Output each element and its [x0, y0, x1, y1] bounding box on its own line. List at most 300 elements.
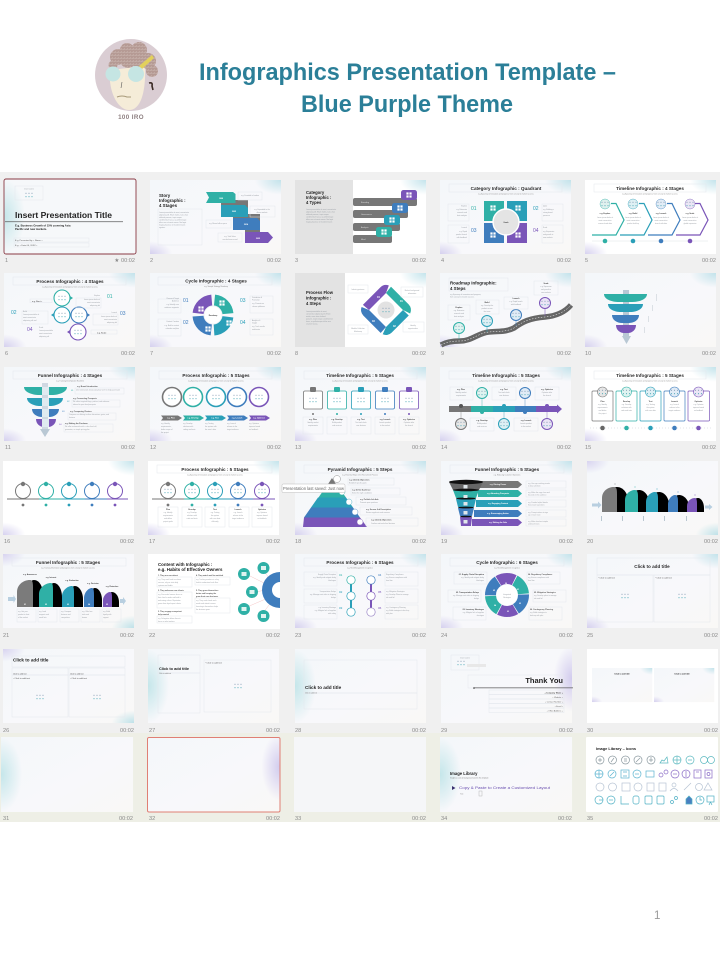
slide 10: funnel graphic without text	[585, 273, 716, 357]
slide 21: funnel infographic arches with text: Funnel Infographic : 5 Stages	[36, 560, 101, 565]
slide 20: arches graphic without text: 00:02	[704, 539, 718, 545]
slide 18: pyramid infographic 5 steps: e.g. Identify Objectives	[349, 478, 370, 482]
slide 22: content with infographic: 5. They grow themselves	[196, 589, 218, 592]
slide 24: cycle infographic 6 stages: Cycle Infographic : 6 Stages	[476, 560, 538, 565]
slide 11: funnel infographic 4 stages: e.g. Making the Purchase	[65, 422, 88, 425]
slide 32: blank selected slide: 00:02	[266, 816, 280, 822]
slide 21: funnel infographic arches with text: e.g. Evaluation	[65, 579, 80, 582]
slide 18: pyramid infographic 5 steps: e.g. Essential Steps in the Recruitment Process	[342, 474, 378, 476]
slide 2: story infographic: Story	[159, 193, 171, 198]
slide 9: roadmap infographic: 4 Steps	[450, 286, 466, 291]
slide 25: two content layout, centered title: 00:02	[704, 633, 718, 639]
slide 25: two content layout, centered title	[587, 554, 718, 639]
slide 7: cycle infographic 4 stages: Audience	[172, 300, 179, 302]
slide 29: thank you slide	[441, 649, 573, 734]
slide 3: category infographic 4 types: condimentum lacus, ac pellentesque	[306, 216, 333, 218]
slide 23: process infographic 6 stages	[295, 554, 426, 639]
slide 6: process infographic 4 stages	[4, 273, 135, 357]
slide 3: category infographic 4 types: 4 Types	[306, 200, 322, 205]
slide 9: roadmap infographic: e.g. Rapid launch	[509, 301, 523, 303]
slide 7: cycle infographic 4 stages: e.g. Track results	[252, 325, 265, 328]
slide 4: category infographic quadrant: e.g. Building a	[543, 209, 554, 211]
slide 24: cycle infographic 6 stages: local law	[528, 580, 535, 582]
slide 27: content with caption layout: Click to add title	[159, 666, 190, 671]
slide 22: content with infographic: e.g. Delegation allows them to	[158, 617, 181, 620]
slide 8: process flow infographic: Industry partners	[352, 288, 364, 291]
slide 13: timeline infographic 5 stages with squares: core features	[356, 424, 366, 427]
slide 3: category infographic 4 types: tellus sem sit amet massa. Sed eget	[306, 218, 334, 221]
slide 5: timeline infographic 4 stages: amet consectetur	[627, 219, 640, 222]
slide 28: section header layout: Click to add title	[305, 685, 342, 690]
slide 13: timeline infographic 5 stages with squares: 13	[295, 445, 301, 451]
slide 12: process infographic 5 stages: on feedback	[249, 429, 258, 431]
slide 11: funnel infographic 4 stages: 02	[67, 401, 70, 403]
slide 22: content with infographic: welcoming culture. Reputation	[158, 599, 181, 602]
slide 12: process infographic 5 stages: coding and tests	[183, 428, 195, 431]
slide 19: funnel infographic 5 stages: up or learn more	[528, 514, 540, 516]
slide 3: category infographic 4 types: Category	[306, 190, 325, 195]
slide 11: funnel infographic 4 stages: 04	[59, 424, 62, 426]
slide 21: funnel infographic arches with text: email lists	[39, 616, 47, 619]
slide 29: thank you slide: + Email +	[555, 706, 564, 708]
slide 4: category infographic quadrant: Category Infographic : Quadrant	[471, 186, 542, 191]
title: Blue Purple Theme	[301, 91, 513, 118]
slide 21: funnel infographic arches with text: e.g. Awareness	[23, 573, 37, 576]
slide 5: timeline infographic 4 stages: amet consectetur	[599, 219, 612, 222]
slide 7: cycle infographic 4 stages: calendar and plan	[166, 327, 179, 330]
slide 24: cycle infographic 6 stages: 24	[441, 633, 447, 639]
slide 12: process infographic 5 stages: e.g. Optimize	[249, 422, 259, 425]
slide 11: funnel infographic 4 stages: Use testimonials showcasing how we fit to help your brand	[76, 388, 120, 392]
slide 22: content with infographic: habit to understand cash flow.	[196, 581, 219, 584]
slide 17: process infographic 5 stages with rings: with user data	[210, 517, 220, 520]
slide 11: funnel infographic 4 stages: features	[69, 416, 75, 419]
slide 13: timeline infographic 5 stages with squares: to the market	[380, 424, 390, 427]
slide 5: timeline infographic 4 stages	[585, 180, 716, 264]
slide 24: cycle infographic 6 stages: blockages	[476, 580, 484, 582]
slide 4: category infographic quadrant: Explore	[461, 204, 467, 208]
slide 21: funnel infographic arches with text: features and	[61, 613, 70, 616]
slide 15: timeline infographic cards: and define	[599, 410, 606, 412]
slide 1: title slide: E.g. + Date 00, 20XX +	[15, 244, 38, 247]
slide 19: funnel infographic 5 stages: e.g. Engaging Content	[488, 502, 508, 505]
slide 12: process infographic 5 stages: the user's data	[205, 428, 216, 431]
slide 28: section header layout: 28	[295, 728, 301, 734]
slide 9: roadmap infographic: Build	[485, 302, 490, 304]
slide 34: image library divider	[440, 737, 572, 822]
slide 14: timeline infographic arrow bar: Timeline Infographic : 5 Stages	[472, 373, 540, 378]
slide 13: timeline infographic 5 stages with squares	[295, 367, 426, 451]
slide 4: category infographic quadrant: 02	[533, 206, 539, 212]
slide 23: process infographic 6 stages: risk and fail	[386, 596, 395, 599]
slide 29: thank you slide: 00:02	[559, 728, 573, 734]
slide 2: story infographic: 1998	[219, 198, 223, 200]
slide 19: funnel infographic 5 stages: e.g. Make checkout simple	[528, 520, 548, 523]
slide 22: content with infographic: better and keeping the	[196, 592, 216, 595]
slide 17: process infographic 5 stages with rings: 00:02	[266, 539, 280, 545]
slide 18: pyramid infographic 5 steps: e.g. Define Audience	[352, 488, 371, 492]
slide 12: process infographic 5 stages: e.g. Launch	[227, 423, 236, 425]
slide 11: funnel infographic 4 stages: We utilize targeted blogs, podcast, and webinars	[73, 400, 109, 403]
slide 7: cycle infographic 4 stages: Insight	[252, 322, 258, 324]
slide 4: category infographic quadrant: 03	[471, 228, 477, 234]
slide 30: two background panels: 00:02	[704, 728, 718, 734]
slide 35: icon library: 00:02	[704, 816, 718, 822]
slide 4: category infographic quadrant: research and	[457, 211, 467, 214]
slide 2: story infographic: Infographic :	[159, 198, 186, 203]
slide 6: process infographic 4 stages: amet consectetur	[23, 316, 36, 319]
slide 21: funnel infographic arches with text: 02	[45, 604, 47, 606]
slide 23: process infographic 6 stages: e.g. Manage route risks in shipping	[310, 593, 336, 596]
slide 18: pyramid infographic 5 steps: Select the right candidates	[352, 492, 372, 494]
slide 24: cycle infographic 6 stages: risk and fail	[534, 597, 543, 600]
slide 12: process infographic 5 stages: improve based	[249, 425, 260, 428]
slide 9: roadmap infographic	[440, 273, 571, 357]
slide 7: cycle infographic 4 stages: e.g. Identify core	[167, 303, 179, 306]
slide 19: funnel infographic 5 stages: Funnel Infographic : 5 Stages	[475, 467, 540, 472]
slide 11: funnel infographic 4 stages: Funnel Infographic : 4 Stages	[38, 373, 103, 378]
slide 17: process infographic 5 stages with rings: Optimize	[258, 508, 266, 511]
slide 5: timeline infographic 4 stages: product build up	[627, 222, 639, 225]
slide 8: process flow infographic: Process Flow	[306, 290, 334, 295]
slide 7: cycle infographic 4 stages: 7	[150, 351, 153, 357]
slide 21: funnel infographic arches with text: e.g. Interest	[46, 576, 57, 579]
slide 26: comparison layout: Click to add text	[70, 672, 84, 676]
slide 18: pyramid infographic 5 steps: Pyramid Infographic : 5 Steps	[328, 467, 393, 472]
slide 23: process infographic 6 stages: e.g. Inventory Shortage	[318, 606, 336, 609]
slide 26: comparison layout: Click to add title	[13, 658, 49, 662]
slide 23: process infographic 6 stages: 00:02	[412, 633, 426, 639]
slide 23: process infographic 6 stages: e.g. Build strategies to back-up	[386, 609, 409, 612]
slide 5: timeline infographic 4 stages: amet consectetur	[655, 219, 668, 222]
slide 2: story infographic: magna placerat, ut tincidunt mauris	[159, 224, 185, 226]
slide 7: cycle infographic 4 stages: 02	[183, 320, 189, 326]
slide 4: category infographic quadrant: e.g. Rapid	[459, 231, 467, 233]
slide 12: process infographic 5 stages: target audience	[227, 428, 239, 431]
slide 10: funnel graphic without text: 10	[585, 351, 591, 357]
slide 23: process infographic 6 stages: 23	[295, 633, 301, 639]
slide 17: process infographic 5 stages with rings: Plan	[166, 509, 171, 511]
slide 22: content with infographic: grow their own business	[196, 595, 218, 598]
slide 26: comparison layout	[3, 649, 134, 734]
slide 9: roadmap infographic: the team	[484, 310, 491, 313]
slide 8: process flow infographic: sit amet massa.	[306, 322, 318, 326]
slide 12: process infographic 5 stages: define scope of	[161, 429, 173, 431]
slide 22: content with infographic: the business grow.	[196, 608, 211, 611]
slide 4: category infographic quadrant: Ignite	[543, 204, 547, 208]
slide 11: funnel infographic 4 stages: 11	[5, 445, 11, 451]
slide 6: process infographic 4 stages: 03	[120, 311, 126, 317]
slide 24: cycle infographic 6 stages: 04. Regulatory Compliance	[528, 573, 552, 576]
slide 19: funnel infographic 5 stages: e.g. Use eye-catching visuals	[528, 482, 550, 485]
slide 18: pyramid infographic 5 steps: Confirm and make final decision	[371, 522, 395, 525]
slide 7: cycle infographic 4 stages: Promotion	[252, 298, 260, 302]
slide 31: blank with teal edge	[1, 737, 133, 822]
slide 15: timeline infographic cards: e.g. Testing	[646, 403, 655, 406]
slide 8: process flow infographic: mattis, nunc vitae eleifend	[306, 315, 326, 318]
slide 2: story infographic: 4 Stages	[159, 203, 178, 208]
slide 6: process infographic 4 stages: e.g. A journey of innovation and progress, from concept to market success.	[42, 286, 98, 288]
slide 3: category infographic 4 types: magna placerat, ut tincidunt mauris	[306, 220, 332, 224]
slide 17: process infographic 5 stages with rings: solutions with	[187, 514, 197, 517]
slide 19: funnel infographic 5 stages: focused on the audience	[528, 494, 546, 496]
slide 15: timeline infographic cards: Develop	[623, 401, 631, 403]
slide 15: timeline infographic cards: Plan	[600, 401, 605, 403]
slide 23: process infographic 6 stages: Transportation Delays	[320, 590, 336, 593]
slide 4: category infographic quadrant: product launch	[456, 233, 467, 236]
slide 30: two background panels: Click to add title	[614, 672, 631, 676]
slide 14: timeline infographic arrow bar: e.g. Plan	[457, 389, 466, 391]
slide 17: process infographic 5 stages with rings: efficiently	[211, 520, 219, 523]
slide 11: funnel infographic 4 stages: e.g. Brand Introduction	[77, 385, 99, 388]
slide 19: funnel infographic 5 stages: that answer questions	[528, 504, 545, 506]
slide 18: pyramid infographic 5 steps	[295, 461, 426, 545]
slide 15: timeline infographic cards: Test	[649, 400, 653, 403]
slide 14: timeline infographic arrow bar: Launch product	[520, 422, 532, 425]
slide 17: process infographic 5 stages with rings: on feedback	[257, 518, 267, 520]
slide 4: category infographic quadrant: 00:02	[557, 258, 571, 264]
slide 5: timeline infographic 4 stages: e.g. Scale	[686, 213, 694, 215]
slide 4: category infographic quadrant: presence	[543, 214, 550, 217]
slide 2: story infographic: 2005	[232, 211, 236, 213]
slide 13: timeline infographic 5 stages with squares: Timeline Infographic : 5 Stages	[326, 373, 394, 378]
slide 7: cycle infographic 4 stages: Research Target	[167, 297, 180, 300]
slide 22: content with infographic: systems and habits.	[158, 584, 173, 587]
slide 12: process infographic 5 stages: Process Infographic : 5 Stages	[182, 373, 250, 378]
slide 3: category infographic 4 types: Analysis	[361, 226, 368, 229]
slide 15: timeline infographic cards: e.g. A journey of innovation and progress, from concept to market success.	[622, 380, 678, 382]
slide 13: timeline infographic 5 stages with squares: e.g. Test	[357, 418, 365, 421]
slide 9: roadmap infographic: and growth in	[541, 288, 551, 291]
slide 7: cycle infographic 4 stages: Roadmap	[209, 315, 218, 317]
slide 15: timeline infographic cards: with user data	[645, 409, 656, 412]
slide 24: cycle infographic 6 stages: Strategies	[503, 596, 511, 599]
slide 27: content with caption layout: Click to add text	[159, 672, 172, 675]
slide 4: category infographic quadrant: Launch	[461, 227, 467, 229]
slide 24: cycle infographic 6 stages: e.g. Ensure compliance with	[528, 576, 549, 579]
slide 19: funnel infographic 5 stages	[441, 461, 573, 545]
slide 25: two content layout, centered title: • Click to add text	[598, 576, 615, 580]
slide 1: title slide: Insert Lorem	[24, 188, 34, 190]
slide 24: cycle infographic 6 stages: 01	[517, 589, 519, 591]
slide 13: timeline infographic 5 stages with squares: Identify market	[307, 421, 319, 424]
slide 34: image library divider: Copy & Paste to Create a Customized Layout	[459, 785, 551, 790]
slide 8: process flow infographic: 8	[295, 351, 298, 357]
slide 14: timeline infographic arrow bar: e.g. Optimize	[541, 388, 553, 391]
slide 11: funnel infographic 4 stages: Compare our offering to other alternatives, gains, and	[69, 413, 109, 416]
slide 15: timeline infographic cards: Timeline Infographic : 5 Stages	[616, 373, 684, 378]
slide 19: funnel infographic 5 stages: e.g. Make the copy clear and	[528, 491, 550, 494]
slide 10: funnel graphic without text: 00:02	[702, 351, 716, 357]
slide 1: title slide: ★ 00:02	[114, 257, 135, 264]
slide 23: process infographic 6 stages: e.g. Develop Plans to manage	[386, 593, 409, 596]
slide 15: timeline infographic cards: solutions with	[621, 406, 632, 409]
slide 7: cycle infographic 4 stages: 03	[240, 298, 246, 304]
slide 2: story infographic	[150, 180, 281, 264]
slide 15: timeline infographic cards: requirements	[598, 406, 608, 409]
slide 4: category infographic quadrant: data analysis	[457, 214, 467, 217]
slide 8: process flow infographic: Infographic :	[306, 296, 331, 300]
slide 6: process infographic 4 stages: Lorem ipsum dolor sit	[23, 313, 40, 316]
slide 8: process flow infographic: 02	[393, 325, 396, 328]
slide 21: funnel infographic arches with text: competitors	[61, 616, 70, 619]
slide 1: title slide: 1	[5, 258, 8, 264]
slide 24: cycle infographic 6 stages: 03. Inventory Shortages	[463, 608, 484, 611]
slide 30: two background panels	[587, 649, 718, 734]
slide 15: timeline infographic cards: Launch	[671, 401, 679, 403]
slide 13: timeline infographic 5 stages with squares: 00:02	[412, 445, 426, 451]
slide 5: timeline infographic 4 stages: e.g. Launch	[656, 213, 667, 215]
slide 22: content with infographic: 3. They engage competent	[158, 610, 182, 613]
slide 14: timeline infographic arrow bar: Build product	[477, 422, 487, 425]
slide 3: category infographic 4 types: adipiscing elit. Etiam mattis, nunc vitae	[306, 210, 335, 214]
slide 3: category infographic 4 types: Mind	[361, 239, 365, 241]
slide 35: icon library: 35	[587, 816, 593, 822]
slide 23: process infographic 6 stages: Regulatory Compliance	[386, 573, 404, 576]
slide 4: category infographic quadrant: strong brand	[543, 211, 553, 214]
slide 4: category infographic quadrant: 04	[533, 228, 539, 234]
slide 22: content with infographic: 00:02	[266, 633, 280, 639]
slide 22: content with infographic: e.g. They read a book each	[196, 599, 217, 602]
slide 26: comparison layout: 00:02	[120, 728, 134, 734]
slide 9: roadmap infographic: e.g. A journey of innovation and progress,	[450, 293, 482, 296]
slide 15: timeline infographic cards: the project	[599, 412, 607, 415]
logo: 100 IRO avatar: 100 IRO	[118, 114, 144, 121]
title: Infographics Presentation Template –	[199, 59, 616, 86]
slide 23: process infographic 6 stages: with safety	[328, 612, 336, 615]
slide 11: funnel infographic 4 stages: tailored to your ideal prospects	[73, 403, 96, 406]
slide 8: process flow infographic: opportunities	[408, 327, 418, 330]
slide 16: process rings without text	[3, 461, 134, 545]
slide 9: roadmap infographic: Roadmap Infographic:	[450, 280, 497, 286]
slide 17: process infographic 5 stages with rings: project goals	[163, 520, 173, 523]
slide 8: process flow infographic: Market background	[405, 289, 419, 292]
slide 29: thank you slide: + Contact Number +	[545, 700, 564, 704]
slide 6: process infographic 4 stages: 02	[11, 310, 17, 316]
slide 1: title slide: Pacific and new markets.	[15, 227, 47, 231]
slide 22: content with infographic: their client's needs and build a	[158, 596, 181, 599]
slide 5: timeline infographic 4 stages: Lorem ipsum dolor sit	[682, 216, 699, 219]
slide 9: roadmap infographic: Launch	[513, 298, 520, 300]
slide 13: timeline infographic 5 stages with squares: e.g. Launch	[380, 419, 391, 421]
slide 23: process infographic 6 stages: 01	[339, 573, 343, 577]
slide 11: funnel infographic 4 stages: e.g. Connecting Prospects	[73, 397, 97, 400]
slide 31: blank with teal edge: 31	[3, 816, 9, 822]
slide 2: story infographic: reached new record	[223, 238, 238, 241]
slide 6: process infographic 4 stages: Process Infographic : 4 Stages	[36, 279, 104, 284]
slide 11: funnel infographic 4 stages: 01	[71, 390, 74, 392]
tooltip: presentation saved: Presentation last saved: Just now	[283, 486, 344, 491]
slide 9: roadmap infographic: e.g. Extensive	[454, 309, 464, 312]
slide 1: title slide: Insert Presentation Title	[15, 211, 113, 220]
slide 11: funnel infographic 4 stages	[4, 367, 135, 451]
slide 17: process infographic 5 stages with rings: improve based	[256, 514, 268, 517]
slide 2: story infographic: eleifend posuere, turpis neque	[159, 216, 182, 219]
slide 18: pyramid infographic 5 steps: 00:02	[412, 539, 426, 545]
slide 7: cycle infographic 4 stages: 04	[240, 320, 246, 326]
slide 21: funnel infographic arches with text: e.g. Decision	[87, 583, 100, 585]
slide 26: comparison layout: 26	[3, 728, 9, 734]
slide 24: cycle infographic 6 stages: 02	[519, 603, 521, 605]
slide 21: funnel infographic arches with text: e.g. Lead	[39, 611, 46, 613]
slide 17: process infographic 5 stages with rings: the system	[211, 514, 220, 517]
slide 5: timeline infographic 4 stages: 00:02	[702, 258, 716, 264]
slide 21: funnel infographic arches with text: e.g. Compare	[61, 610, 71, 613]
slide 21: funnel infographic arches with text: 05	[106, 604, 108, 606]
slide 3: category infographic 4 types: Governance	[361, 214, 373, 216]
slide 15: timeline infographic cards	[585, 367, 716, 451]
slide 13: timeline infographic 5 stages with squares: the launch	[405, 424, 413, 427]
slide 6: process infographic 4 stages: 04	[27, 327, 33, 333]
slide 17: process infographic 5 stages with rings: Launch	[235, 509, 242, 511]
slide 21: funnel infographic arches with text: e.g. Offer free	[82, 610, 92, 613]
slide 8: process flow infographic: Module Collection	[351, 327, 365, 330]
slide 15: timeline infographic cards: target audience	[669, 409, 680, 412]
slide 17: process infographic 5 stages with rings: release to the	[233, 514, 243, 517]
slide 13: timeline infographic 5 stages with squares: Build product	[332, 421, 342, 424]
slide 33: blank pale slide	[294, 737, 426, 822]
slide 19: funnel infographic 5 stages: 19	[441, 539, 447, 545]
slide 14: timeline infographic arrow bar: 00:02	[557, 445, 571, 451]
slide 15: timeline infographic cards: e.g. Launch	[670, 404, 679, 406]
slide 11: funnel infographic 4 stages: 03	[62, 411, 65, 413]
slide 5: timeline infographic 4 stages: research and data	[598, 222, 612, 225]
slide 8: process flow infographic: information	[408, 292, 416, 295]
slide 12: process infographic 5 stages: solutions with	[183, 425, 193, 428]
slide 24: cycle infographic 6 stages: delays	[474, 598, 479, 600]
slide 35: icon library: Image Library – Icons	[596, 746, 636, 751]
slide 7: cycle infographic 4 stages: and iterate	[252, 328, 260, 331]
slide 21: funnel infographic arches with text	[3, 554, 134, 639]
slide 5: timeline infographic 4 stages: Timeline Infographic : 4 Stages	[616, 186, 684, 191]
slide 23: process infographic 6 stages: delays	[331, 597, 336, 599]
slide 24: cycle infographic 6 stages: 00:02	[559, 633, 573, 639]
slide 18: pyramid infographic 5 steps: e.g. Publish Job Ads	[360, 498, 379, 501]
slide 26: comparison layout: • Click to add text	[13, 677, 30, 680]
slide 15: timeline infographic cards: e.g. Identify	[598, 403, 607, 406]
slide 4: category infographic quadrant: with feedback	[457, 236, 467, 239]
tooltip: presentation saved	[282, 484, 345, 492]
slide 22: content with infographic: help wanted	[158, 613, 170, 616]
slide 23: process infographic 6 stages: local law	[386, 580, 393, 582]
slide 14: timeline infographic arrow bar: Optimize after	[542, 391, 553, 394]
slide 30: two background panels: 30	[587, 728, 593, 734]
slide 6: process infographic 4 stages: Explore	[94, 294, 100, 297]
slide 11: funnel infographic 4 stages: e.g. Comparing Choices	[70, 411, 92, 413]
slide 6: process infographic 4 stages: amet consectetur	[87, 301, 100, 304]
slide 9: roadmap infographic: product across	[481, 307, 493, 310]
slide 20: arches graphic without text: 20	[587, 539, 593, 545]
slide 32: blank selected slide	[147, 737, 280, 822]
slide 17: process infographic 5 stages with rings	[148, 461, 280, 545]
slide 9: roadmap infographic: 00:02	[557, 351, 571, 357]
slide 4: category infographic quadrant: and growth in	[543, 233, 553, 236]
slide 21: funnel infographic arches with text: trials and	[82, 613, 89, 616]
slide 27: content with caption layout: 27	[149, 728, 155, 734]
slide 12: process infographic 5 stages: e.g. Identify	[161, 422, 170, 425]
slide 18: pyramid infographic 5 steps: e.g. Identify Objectives	[371, 518, 392, 522]
slide 14: timeline infographic arrow bar: core features	[499, 394, 509, 397]
slide 7: cycle infographic 4 stages: Cycle Infographic : 4 Stages	[185, 278, 247, 284]
slide 17: process infographic 5 stages with rings: 17	[149, 539, 155, 545]
slide 22: content with infographic: e.g. Successful owners focus on	[158, 593, 182, 596]
slide 6: process infographic 4 stages: adipiscing elit	[90, 304, 101, 307]
slide 23: process infographic 6 stages: e.g. Risk Management in Logistics	[347, 566, 373, 570]
slide 19: funnel infographic 5 stages: e.g. Provide helpful details	[528, 501, 548, 504]
icon grid	[595, 756, 714, 805]
slide 5: timeline infographic 4 stages: Lorem ipsum dolor sit	[597, 216, 614, 219]
slide 34: image library divider: 00:02	[558, 816, 572, 822]
